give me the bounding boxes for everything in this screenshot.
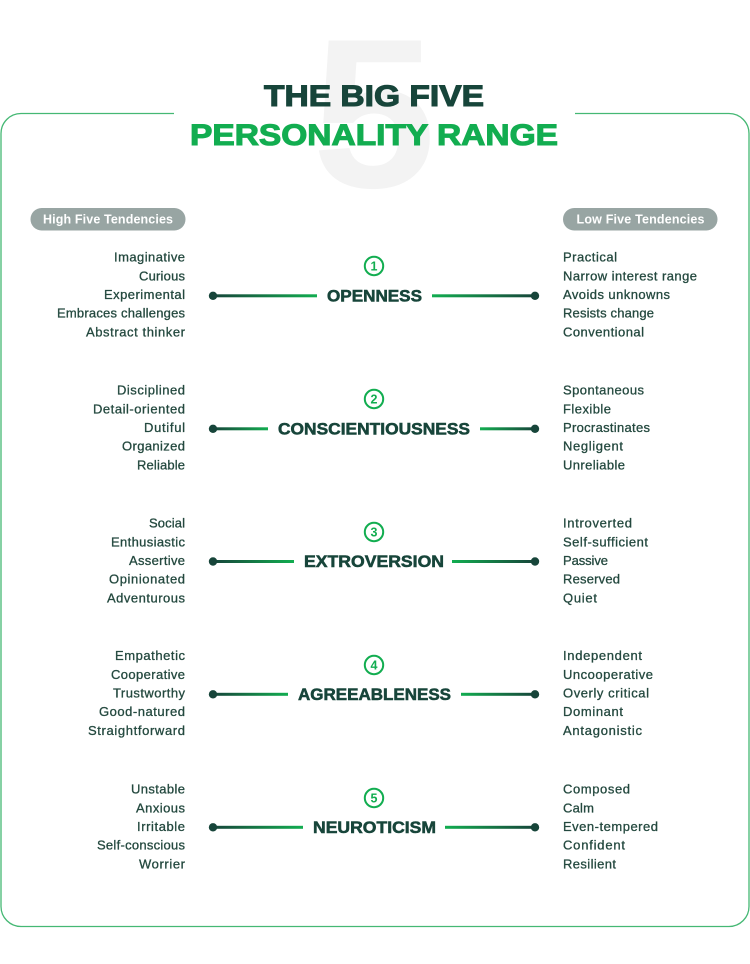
trait name: NEUROTICISM [313,819,436,837]
low tendencies: extroversion: Self-sufficient [563,534,648,549]
high tendencies: agreeableness: Empathetic [115,648,186,663]
high tendencies: openness [57,250,186,339]
pill: high five tendencies [30,208,186,230]
low tendencies: neuroticism [563,782,658,871]
high tendencies: conscientiousness: Dutiful [144,420,185,435]
number badge 1: 1 [371,260,378,274]
high tendencies: neuroticism: Worrier [139,856,186,871]
high tendencies: neuroticism: Unstable [131,782,185,797]
high tendencies: openness: Curious [139,268,186,283]
number badge 4: 4 [371,658,378,672]
high tendencies: agreeableness: Trustworthy [113,686,186,701]
range line left [209,823,303,832]
number badge 2 [365,390,383,408]
panel: extroversion [107,516,648,605]
trait name: CONSCIENTIOUSNESS [278,420,470,438]
low tendencies: conscientiousness [563,383,650,472]
high tendencies: openness: Imaginative [114,250,185,265]
number badge 4 [365,656,383,674]
low tendencies: neuroticism: Composed [563,782,630,797]
low tendencies: conscientiousness: Flexible [563,401,611,416]
low tendencies: extroversion: Passive [563,553,608,568]
range line right [461,690,539,698]
range line left [209,557,294,566]
ghost numeral 5: 5 [312,0,436,233]
low tendencies: neuroticism: Even-tempered [563,819,658,834]
high tendencies: conscientiousness [93,383,185,472]
low tendencies: neuroticism: Confident [563,838,625,853]
high tendencies: extroversion: Assertive [129,553,185,568]
high tendencies: extroversion: Opinionated [109,572,185,587]
low tendencies: agreeableness: Uncooperative [563,667,653,682]
number badge 1 [365,257,383,275]
panel: neuroticism [97,782,658,871]
high tendencies: extroversion [107,516,186,605]
number badge 5 [365,789,383,807]
low tendencies: extroversion: Introverted [563,516,632,531]
range line right [432,292,539,300]
low tendencies: conscientiousness: Negligent [563,439,623,454]
panel: conscientiousness [93,383,650,472]
range line right [445,823,539,832]
low tendencies: openness: Resists change [563,306,654,321]
low tendencies: extroversion: Quiet [563,590,597,605]
title: THE BIG FIVE [264,80,484,113]
low tendencies: agreeableness: Antagonistic [563,723,642,738]
high tendencies: conscientiousness: Disciplined [117,383,185,398]
number badge 3: 3 [371,526,378,540]
low tendencies: conscientiousness: Unreliable [563,457,625,472]
low tendencies: openness: Avoids unknowns [563,287,670,302]
high tendencies: agreeableness: Cooperative [111,667,185,682]
range line left [209,425,268,433]
range line left [209,292,317,300]
high tendencies: extroversion: Adventurous [107,590,186,605]
high tendencies: conscientiousness: Organized [122,439,185,454]
panel: openness [57,250,697,339]
high tendencies: agreeableness: Straightforward [88,723,185,738]
low tendencies: neuroticism: Calm [563,800,594,815]
low tendencies: openness: Practical [563,250,617,265]
low tendencies: openness [563,250,697,339]
range line left [209,690,288,698]
low tendencies: conscientiousness: Spontaneous [563,383,644,398]
pill: high five tendencies: High Five Tendencies [43,212,173,226]
high tendencies: openness: Experimental [104,287,185,302]
low tendencies: agreeableness: Independent [563,648,642,663]
number badge 3 [365,523,383,541]
panel: agreeableness [88,648,653,738]
high tendencies: openness: Embraces challenges [57,306,186,321]
title [190,80,558,152]
high tendencies: neuroticism: Self-conscious [97,838,186,853]
high tendencies: conscientiousness: Reliable [137,457,185,472]
range line right [452,557,539,566]
high tendencies: extroversion: Social [149,516,185,531]
number badge 2: 2 [371,392,378,406]
low tendencies: extroversion [563,516,648,605]
low tendencies: neuroticism: Resilient [563,856,616,871]
number badge 5: 5 [371,792,378,806]
low tendencies: agreeableness: Overly critical [563,686,649,701]
low tendencies: openness: Narrow interest range [563,268,697,283]
trait name: AGREEABLENESS [298,686,451,704]
title: PERSONALITY RANGE [190,119,558,152]
low tendencies: conscientiousness: Procrastinates [563,420,650,435]
high tendencies: agreeableness: Good-natured [99,704,185,719]
low tendencies: extroversion: Reserved [563,572,620,587]
high tendencies: neuroticism: Anxious [136,800,186,815]
high tendencies: openness: Abstract thinker [86,324,186,339]
trait name: OPENNESS [327,288,422,306]
pill: low five tendencies [563,208,718,230]
high tendencies: agreeableness [88,648,186,738]
trait name: EXTROVERSION [304,553,444,571]
high tendencies: neuroticism: Irritable [137,819,185,834]
low tendencies: agreeableness [563,648,653,738]
low tendencies: agreeableness: Dominant [563,704,623,719]
high tendencies: conscientiousness: Detail-oriented [93,401,185,416]
high tendencies: extroversion: Enthusiastic [111,534,186,549]
high tendencies: neuroticism [97,782,186,871]
pill: low five tendencies: Low Five Tendencies [576,212,705,226]
low tendencies: openness: Conventional [563,324,644,339]
range line right [480,425,539,433]
